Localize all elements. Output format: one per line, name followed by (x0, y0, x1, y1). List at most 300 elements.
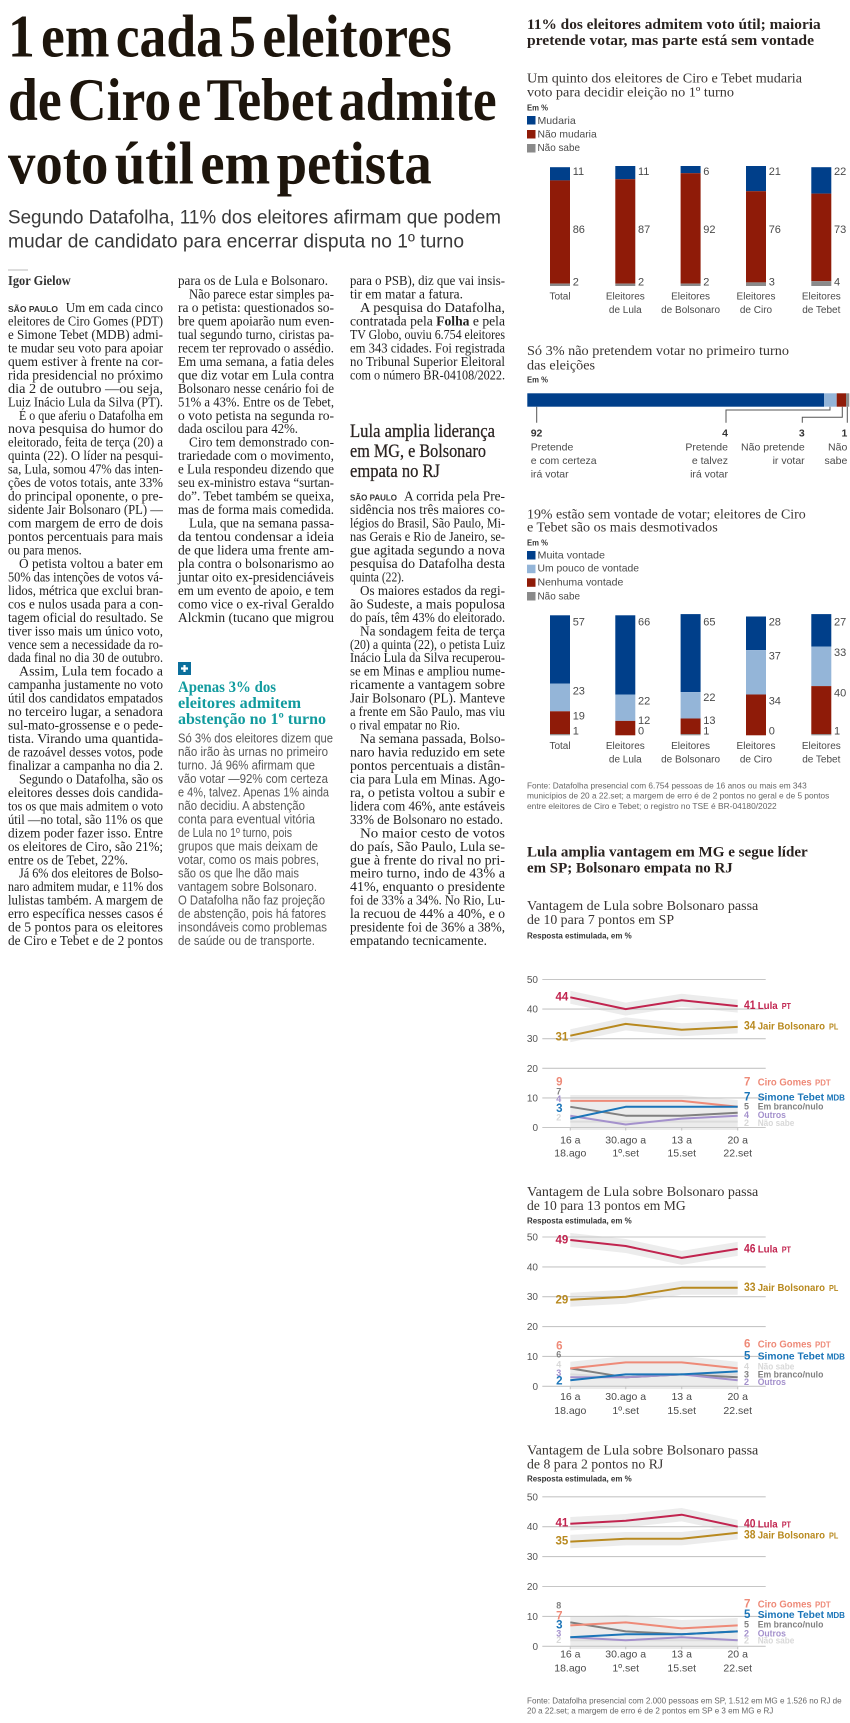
text block: article column 1: 50% das intenções de votos vá- (8, 570, 163, 585)
bar values: 11 (573, 166, 584, 178)
bar labels: e talvez (692, 455, 728, 467)
y axis labels (527, 975, 538, 1134)
text block: article column 2: Em uma semana, a fatia deles (178, 355, 334, 370)
category labels: Total (549, 291, 571, 302)
left value labels: 8 (556, 1601, 561, 1611)
bar labels: 1 (841, 428, 847, 440)
y axis labels: 10 (527, 1352, 538, 1363)
source note: entre eleitores de Ciro e Tebet; o registro no TSE é BR-04180/2022 (527, 801, 777, 811)
text block: article column 3 (350, 274, 506, 383)
text block: second article: cia para Lula em Minas. Ago- (350, 772, 505, 788)
bar values: 1 (703, 726, 709, 738)
chart title: das eleições (527, 358, 595, 373)
x axis labels: 30.ago a (605, 1649, 646, 1661)
text block: article column 2: para os de Lula e Bolsonaro. (178, 274, 328, 289)
legend (527, 550, 639, 602)
bar values: 76 (769, 224, 781, 236)
text block: article column 1: te mudar seu voto para apoiar (8, 341, 163, 356)
text block: article column 3: contratada pela Folha e pela (350, 314, 506, 330)
right candidate labels: Lula (758, 1519, 778, 1531)
source note: Fonte: Datafolha presencial com 2.000 pessoas em SP, 1.512 em MG e 1.526 no RJ de (527, 1695, 842, 1705)
source note: municípios de 20 a 22.set; a margem de erro é de 2 pontos no geral e de 5 pontos (527, 791, 829, 801)
y axis labels: 50 (527, 1232, 538, 1244)
leader lines (537, 407, 847, 423)
text block: article column 1: Já 6% dos eleitores de Bolso- (19, 867, 163, 882)
heading: Lula amplia vantagem: Lula amplia vantagem em MG e segue líder (527, 845, 808, 861)
y axis labels: 10 (527, 1612, 538, 1623)
chart title: Resposta estimulada, em % (527, 1475, 632, 1484)
bar labels (531, 428, 847, 480)
source note (527, 780, 829, 811)
right candidate labels: 4 (744, 1361, 749, 1371)
text block: article column 1: no terceiro lugar, a senadora (8, 705, 164, 720)
text block: article column 2 (177, 274, 335, 626)
chart title: Um quinto dos eleitores de Ciro e Tebet mudaria (527, 72, 803, 87)
category labels: Eleitores (671, 741, 710, 752)
text block: article column 2: bre quem apoiarão num even- (178, 314, 334, 330)
text block: article column 1: campanha justamente no voto (8, 678, 163, 693)
sidebar text: não decidiu. A abstenção (178, 799, 305, 813)
y axis labels: 20 (527, 1322, 538, 1333)
bar labels: Não (828, 442, 847, 454)
bar labels: ir votar (773, 455, 805, 467)
source note: 20 a 22.set; a margem de erro é de 2 pontos em SP e 3 em MG e RJ (527, 1705, 773, 1715)
text block: article column 2: o voto petista na segunda ro- (178, 409, 334, 424)
text block: second article: SÃO PAULO (350, 493, 397, 503)
sidebar text: turno. Já 96% afirmam que (178, 759, 315, 773)
heading: Lula amplia liderança (350, 421, 495, 482)
stacked bars (550, 614, 831, 735)
bar values: 13 (703, 715, 716, 727)
chart title: Vantagem de Lula sobre Bolsonaro passa (527, 1444, 759, 1459)
bar values: 2 (638, 277, 644, 289)
right candidate labels: Ciro Gomes (758, 1598, 812, 1610)
heading: Lula amplia liderança: em MG, e Bolsonaro (350, 441, 486, 462)
text block: article column 1: ou para menos. (8, 544, 82, 558)
bar values: 4 (834, 277, 840, 289)
bar values: 92 (703, 224, 716, 236)
text block: article column 1: tista. Virando uma quantida- (8, 732, 163, 747)
chart title (527, 72, 803, 113)
panel: abstention bar (527, 344, 849, 480)
category labels: Total (549, 741, 571, 752)
y axis labels: 20 (527, 1582, 538, 1593)
text block: article column 1: com margem de erro de dois (8, 516, 163, 532)
right candidate labels: Jair Bolsonaro (758, 1021, 825, 1033)
text block: article column 1: erro específica nesses casos é (8, 907, 163, 922)
y axis labels: 20 (527, 1064, 538, 1075)
bar values: 3 (769, 277, 775, 289)
right candidate labels: Não sabe (758, 1361, 794, 1371)
bar labels: Pretende (685, 442, 728, 454)
text block: second article: sidência nos três maiores co- (350, 503, 505, 518)
margin bands (570, 1508, 738, 1649)
chart title: Resposta estimulada, em % (527, 1216, 632, 1225)
data lines (570, 1515, 738, 1640)
category labels: de Bolsonaro (661, 305, 721, 316)
bar values: 2 (703, 277, 709, 289)
right candidate labels: PT (782, 1244, 792, 1254)
right candidate labels: Não sabe (758, 1636, 794, 1646)
icon: plus (178, 662, 191, 675)
bar values: 33 (834, 647, 846, 659)
right candidate labels: 34 (744, 1021, 756, 1033)
text block: article column 1: SÃO PAULO (8, 304, 58, 314)
legend: Não sabe (538, 590, 580, 602)
text block: article column 1: Um em cada cinco (66, 301, 163, 316)
left value labels: 7 (556, 1087, 561, 1097)
right candidate labels: 4 (744, 1110, 749, 1120)
right candidate labels: Lula (758, 1000, 778, 1012)
bar values: 6 (703, 166, 709, 178)
left value labels: 6 (556, 1340, 563, 1352)
right candidate labels: 40 (744, 1519, 756, 1531)
chart title: Em % (527, 376, 548, 385)
bar values: 0 (638, 726, 644, 738)
y axis labels (527, 1232, 538, 1393)
text block: article column 1: lulistas também. A margem de (8, 894, 163, 909)
x axis labels: 15.set (667, 1405, 696, 1417)
text block: second article: a frente em São Paulo, mas viu (350, 705, 505, 720)
y axis labels: 50 (527, 975, 538, 986)
sidebar heading: eleitores admitem (178, 695, 302, 712)
text block: article column 2: ra o petista: questionados so- (178, 301, 334, 316)
chart title: voto para decidir eleição no 1º turno (527, 86, 734, 101)
panel: abstention sidebar (178, 662, 333, 948)
x axis labels: 15.set (667, 1148, 696, 1160)
chart title (527, 899, 759, 940)
heading: Lula amplia liderança: Lula amplia liderança (350, 421, 495, 442)
bar values: 23 (573, 686, 585, 698)
text block: article column 1: tagem oficial do resultado. Se (8, 611, 163, 626)
category labels: Eleitores (802, 291, 841, 302)
text block: second article: la recuou de 44% a 40%, e o (350, 907, 505, 922)
stacked bars (550, 166, 831, 286)
text block: article column 1: de Ciro e Tebet e de 2 pontos (8, 934, 163, 949)
sidebar text: votar, como os mais pobres, (178, 853, 319, 867)
panel: line chart SP (527, 899, 845, 1160)
legend: Um pouco de vontade (538, 563, 639, 575)
text block: article column 1: sa, Lula, somou 47% das inten- (8, 463, 163, 478)
right candidate labels: PL (829, 1531, 838, 1541)
text block: article column 1: do principal oponente, o pre- (8, 490, 163, 505)
bar values (573, 616, 846, 738)
x axis labels: 1º.set (612, 1663, 639, 1675)
text block: article column 1: cos e nulos usada para a con- (8, 597, 163, 612)
bar values: 12 (638, 715, 650, 727)
text block: article column 2: trariedade com o movimento, (178, 449, 334, 464)
text block: article column 1: eleitores de Ciro Gomes (PDT) (8, 314, 163, 330)
right candidate labels: 2 (744, 1628, 749, 1638)
text block: article column 1: Assim, Lula tem focado a (19, 665, 164, 680)
text block: article column 2: e Lula respondeu dizendo que (178, 463, 334, 478)
text block: second article: 41%, enquanto o presidente (350, 880, 505, 895)
category labels: de Tebet (802, 305, 841, 316)
right candidate labels: PDT (815, 1077, 831, 1087)
left value labels: 3 (556, 1368, 561, 1378)
right candidate labels (744, 1519, 845, 1646)
right candidate labels: Em branco/nulo (758, 1102, 824, 1112)
right candidate labels: Jair Bolsonaro (758, 1530, 825, 1542)
right candidate labels (744, 1243, 845, 1387)
x axis labels: 16 a (560, 1134, 581, 1146)
text block: article column 2: Ciro tem demonstrado con- (189, 436, 334, 451)
x axis labels: 18.ago (554, 1405, 587, 1417)
left value labels: 4 (556, 1094, 561, 1104)
text block: second article: légios do Brasil, São Paulo, Mi- (350, 516, 505, 532)
left value labels: 3 (556, 1103, 563, 1115)
x axis labels: 20 a (727, 1649, 748, 1661)
y axis labels: 30 (527, 1292, 538, 1303)
text block: article column 2: de que lidera uma frente am- (178, 544, 334, 558)
bar values: 22 (638, 696, 650, 708)
sidebar text: são os que lhe dão mais (178, 867, 299, 881)
sidebar text: conta para eventual vitória (178, 813, 315, 827)
category labels: Eleitores (737, 291, 775, 302)
chart title (527, 1185, 759, 1225)
text block: article column 2: que diz votar em Lula contra (178, 368, 335, 383)
text block: second article: do país, têm 43% do eleitorado. (350, 611, 505, 626)
right candidate labels: 6 (744, 1338, 750, 1350)
bar labels: irá votar (690, 468, 728, 480)
left value labels: 41 (556, 1518, 569, 1530)
heading: Lula amplia vantagem: em SP; Bolsonaro empata no RJ (527, 861, 733, 877)
text block: article column 3: em 343 cidades. Foi registrada (350, 341, 506, 356)
sidebar heading: abstenção no 1º turno (178, 711, 326, 728)
bar values: 11 (638, 166, 649, 178)
text block: second article: No maior cesto de votos (360, 826, 505, 841)
text block: article column 1: de 5 pontos para os eleitores (8, 921, 163, 936)
chart title: Só 3% não pretendem votar no primeiro turno (527, 344, 789, 359)
source note: Fonte: Datafolha presencial com 6.754 pessoas de 16 anos ou mais em 343 (527, 780, 807, 790)
text block: article column 1: de razoável desses votos, pode (8, 746, 163, 760)
left value labels: 2 (556, 1376, 563, 1388)
right candidate labels: 7 (744, 1092, 750, 1104)
y axis labels: 40 (527, 1522, 538, 1533)
bar labels: irá votar (531, 468, 569, 480)
text block: article column 3: TV Globo, ouviu 6.754 eleitores (350, 328, 505, 343)
right candidate labels: 5 (744, 1351, 751, 1363)
text block: article column 1: útil dos candidatos empatados (8, 692, 163, 707)
category labels: Eleitores (737, 741, 775, 752)
sidebar text: vão votar —92% com certeza (178, 772, 328, 786)
bar values (573, 166, 846, 289)
sidebar text: e 4%, talvez. Apenas 1% ainda (178, 786, 329, 800)
bar values: 27 (834, 616, 846, 628)
text block: article column 1: tos os que mais admitem o voto (8, 799, 163, 814)
left value labels (556, 1235, 568, 1388)
y axis labels: 50 (527, 1492, 538, 1503)
text block: article column 2: pla contra o bolsonarismo ao (178, 557, 334, 572)
bar labels: 3 (799, 428, 805, 440)
x axis labels: 22.set (723, 1148, 752, 1160)
text block: article column 1: tiver isso mais um único voto, (8, 624, 163, 639)
byline: Igor Gielow (8, 273, 71, 288)
right candidate labels: Simone Tebet (758, 1092, 824, 1104)
text block: article column 2: como vice o ex-rival Geraldo (178, 597, 334, 612)
right candidate labels: Não sabe (758, 1118, 794, 1128)
text block: article column 1: vence sem a necessidade da ro- (8, 638, 163, 653)
right candidate labels: 5 (744, 1619, 749, 1629)
title: 1 em cada 5 eleitores (8, 4, 452, 70)
grid lines (542, 1237, 766, 1389)
text block: second article: do país, São Paulo, Lula se- (350, 840, 505, 855)
bar values: 87 (638, 224, 650, 236)
right candidate labels: PT (782, 1001, 792, 1011)
text block: second article: meiro turno, indo de 43% a (350, 867, 506, 882)
data lines (570, 997, 738, 1124)
text block: article column 2: mas de forma mais comedida. (178, 503, 334, 518)
text block: second article: naro havia reduzido em sete (350, 746, 505, 760)
category labels: de Bolsonaro (661, 755, 721, 766)
right candidate labels: 2 (744, 1636, 749, 1646)
chart title (527, 507, 806, 547)
text block: second article: o rival empatar no Rio. (350, 719, 460, 734)
text block: second article: Os maiores estados da regi- (360, 584, 505, 599)
subtitle: mudar de candidato para encerrar disputa no 1º turno (8, 231, 464, 252)
chart title: de 8 para 2 pontos no RJ (527, 1458, 664, 1473)
right candidate labels: PDT (815, 1599, 831, 1609)
legend: Não mudaria (538, 128, 597, 140)
bar labels: 4 (722, 428, 728, 440)
text block: second article: presidente foi de 36% a 38%, (350, 921, 505, 936)
left value labels: 29 (556, 1294, 568, 1306)
data lines (570, 1240, 738, 1380)
left value labels: 9 (556, 1077, 563, 1089)
right candidate labels: 46 (744, 1243, 756, 1255)
text block: article column 2: em um evento de apoio, e tem (178, 584, 334, 599)
x axis labels: 18.ago (554, 1663, 587, 1675)
y axis labels: 40 (527, 1005, 538, 1016)
sidebar text: O Datafolha não faz projeção (178, 894, 325, 908)
legend: Não sabe (538, 142, 580, 154)
x axis labels: 22.set (723, 1663, 752, 1675)
category labels: de Tebet (802, 755, 841, 766)
text block: article column 1: Luiz Inácio Lula da Silva (PT). (8, 395, 163, 410)
text block: article column 1: dia 2 de outubro —ou seja, (8, 382, 163, 397)
x axis labels: 20 a (727, 1391, 748, 1403)
bar values: 40 (834, 688, 846, 700)
sidebar text: vantagem sobre Bolsonaro. (178, 880, 317, 894)
left value labels: 2 (556, 1113, 561, 1123)
margin bands (570, 991, 738, 1130)
margin bands (570, 1233, 738, 1389)
category labels: de Lula (609, 755, 642, 766)
left value labels (556, 1518, 569, 1645)
text block: second article: A corrida pela Pre- (404, 490, 505, 505)
right candidate labels: Ciro Gomes (758, 1338, 812, 1350)
text block: article column 1: pontos percentuais para mais (8, 530, 163, 545)
text block: article column 2: da tentou condensar a ideia (178, 530, 335, 545)
right candidate labels: Simone Tebet (758, 1609, 824, 1621)
panel: line chart RJ (527, 1444, 845, 1675)
text block: article column 1: Segundo o Datafolha, são os (19, 772, 163, 788)
y axis labels: 40 (527, 1262, 538, 1273)
left value labels: 35 (556, 1536, 569, 1548)
right candidate labels: Em branco/nulo (758, 1369, 824, 1379)
text block: article column 2: Não parece estar simples pa- (189, 288, 334, 302)
text block: article column 2: seu ex-ministro estava “surtan- (178, 476, 334, 491)
x axis labels (554, 1391, 752, 1417)
bar values: 65 (703, 616, 716, 628)
text block: second article: pontos percentuais a distân- (350, 759, 505, 774)
chart title: Em % (527, 538, 548, 547)
text block: article column 1: quinta (22). O líder na pesqui- (8, 449, 163, 464)
chart title: e Tebet são os mais desmotivados (527, 521, 718, 536)
x axis labels: 1º.set (612, 1148, 639, 1160)
x axis labels (554, 1649, 752, 1675)
sidebar text: Só 3% dos eleitores dizem que (178, 732, 333, 746)
y axis labels: 30 (527, 1034, 538, 1045)
text block: article column 1: ções de votos totais, ante 33% (8, 476, 163, 491)
category labels: de Lula (609, 305, 642, 316)
sidebar text: insondáveis como problemas (178, 921, 327, 935)
title: de Ciro e Tebet admite (8, 67, 497, 133)
text block: article column 1: O petista voltou a bater em (19, 557, 163, 572)
text block: second article: gue à frente do rival no pri- (350, 853, 505, 868)
x axis labels: 30.ago a (605, 1391, 646, 1403)
bar values: 21 (769, 166, 781, 178)
text block: second article: gue agitada segundo a nova (350, 544, 506, 558)
x axis labels: 16 a (560, 1391, 581, 1403)
category labels (549, 291, 841, 316)
text block: article column 1: sul-mato-grossense e o pede- (8, 719, 163, 734)
text block: second article (350, 490, 506, 949)
bar values: 57 (573, 616, 585, 628)
text block: article column 1: dada final no dia 30 de outubro. (8, 651, 163, 666)
text block: article column 3: tir em matar a fatura. (350, 288, 463, 302)
text block: second article: (20) a quinta (22), o petista Luiz (350, 638, 505, 653)
category labels: Eleitores (802, 741, 841, 752)
text block: article column 1: lidos, métrica que exclui bran- (8, 584, 163, 599)
text block: second article: se em Minas e ampliou nume- (350, 665, 505, 680)
right candidate labels: PDT (815, 1339, 831, 1349)
right candidate labels: MDB (827, 1093, 845, 1103)
text block: article column 2: tual segundo turno, ciristas pa- (178, 328, 334, 343)
x axis labels: 20 a (727, 1134, 748, 1146)
x axis labels (554, 1134, 752, 1160)
bar values: 19 (573, 711, 585, 723)
right candidate labels: Jair Bolsonaro (758, 1282, 825, 1294)
text block: second article: ão Sudeste, a mais populosa (350, 597, 506, 612)
text block: article column 2: Lula, que na semana passa- (189, 516, 334, 532)
right candidate labels: 38 (744, 1530, 756, 1542)
text block: article column 2: recem ter reprovado o assédio. (178, 341, 334, 356)
bar labels: Não pretende (741, 442, 805, 454)
sidebar text: de saúde ou de transporte. (178, 934, 315, 948)
legend: Mudaria (538, 115, 576, 127)
text block: second article: 33% de Bolsonaro no estado. (350, 813, 503, 828)
x axis labels: 22.set (723, 1405, 752, 1417)
text block: article column 2: juntar oito ex-presidenciáveis (177, 570, 334, 585)
sidebar heading (178, 679, 326, 728)
chart title (527, 1444, 759, 1484)
bar values: 34 (769, 696, 781, 708)
legend (527, 115, 597, 154)
left value labels: 2 (556, 1635, 561, 1645)
heading: voto útil panel (527, 17, 821, 49)
x axis labels: 13 a (671, 1391, 692, 1403)
text block: article column 1: É o que aferiu o Datafolha em (19, 407, 163, 424)
category labels: Eleitores (606, 741, 645, 752)
right candidate labels: 2 (744, 1118, 749, 1128)
text block: article column 1: sidente Jair Bolsonaro (PL) — (8, 503, 164, 518)
right candidate labels (744, 1000, 845, 1128)
chart title (527, 344, 789, 385)
text block: second article: Jair Bolsonaro (PL). Manteve (350, 692, 505, 707)
y axis labels (527, 1492, 538, 1653)
chart title: Vantagem de Lula sobre Bolsonaro passa (527, 1185, 759, 1200)
